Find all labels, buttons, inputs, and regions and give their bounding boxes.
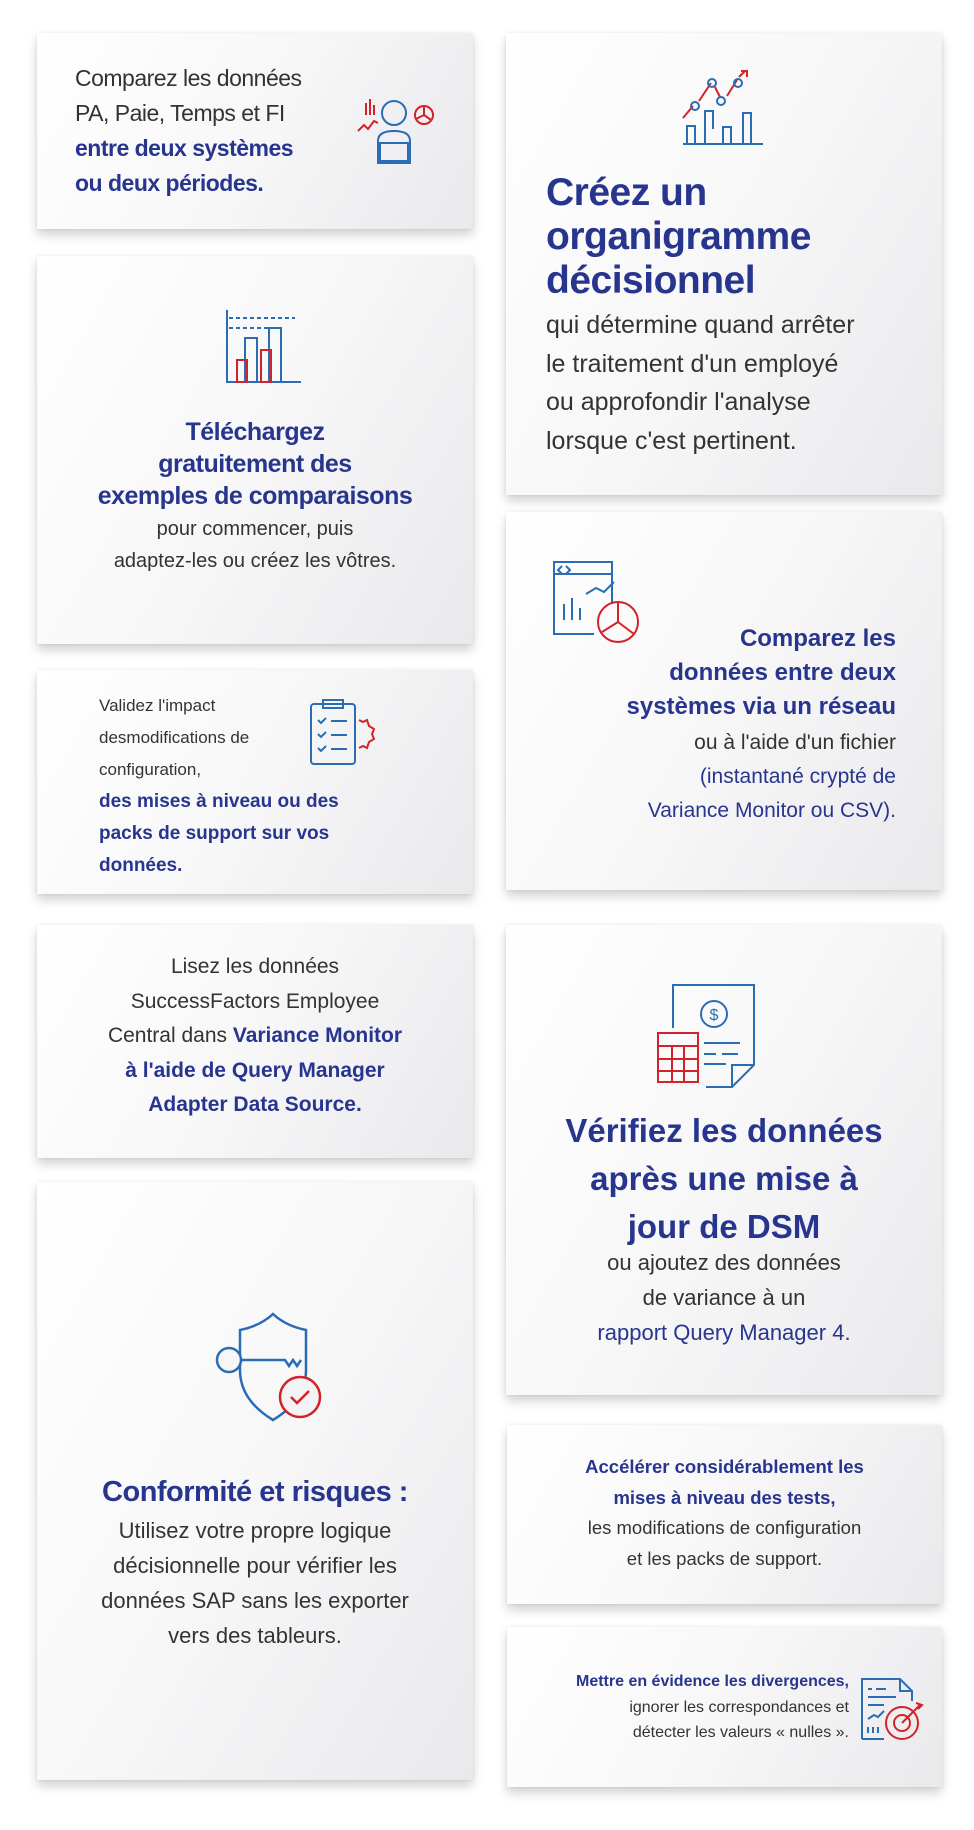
icon: growth chart [682, 70, 763, 145]
text: body [648, 731, 896, 822]
text: validate: données. [99, 855, 182, 876]
text: compare PA: ou deux périodes. [75, 170, 263, 196]
panel: accelerate tests [507, 1425, 942, 1604]
text: successfactors [108, 955, 402, 1116]
text: validate: desmodifications de [99, 728, 249, 747]
text: body: lorsque c'est pertinent. [546, 426, 797, 454]
text: compliance body: décisionnelle pour vérifier les [113, 1553, 397, 1578]
text: body [597, 1250, 851, 1345]
heading: create flowchart: décisionnel [546, 259, 755, 302]
text: validate: Validez l'impact [99, 696, 215, 715]
text: body: rapport Query Manager 4. [597, 1320, 851, 1345]
heading: create flowchart: organigramme [546, 215, 811, 258]
heading: compare systems [626, 625, 896, 720]
text: body: le traitement d'un employé [546, 350, 838, 378]
text: body: qui détermine quand arrêter [546, 311, 855, 339]
heading: create flowchart [546, 171, 811, 302]
text: body: (instantané crypté de [700, 765, 896, 788]
text: compare PA [75, 65, 302, 196]
text: validate: packs de support sur vos [99, 823, 329, 844]
text: successfactors: SuccessFactors Employee [131, 990, 379, 1012]
text: body [114, 518, 396, 572]
text: body: ou à l'aide d'un fichier [694, 731, 896, 754]
panel: validate impact [37, 670, 473, 894]
text: successfactors: à l'aide de Query Manager [125, 1058, 385, 1082]
text: body: ou approfondir l'analyse [546, 388, 811, 416]
icon: report target [861, 1678, 924, 1740]
panel: compare PA data [37, 33, 473, 229]
heading: verify: jour de DSM [628, 1208, 820, 1245]
panel: compare via network [506, 512, 942, 890]
heading: compare systems: Comparez les [740, 625, 896, 652]
icon: bar chart [226, 310, 301, 383]
icon: document calculator [657, 984, 755, 1088]
text: body [546, 311, 855, 454]
text: validate [99, 696, 339, 876]
panel: decision flowchart [506, 33, 942, 495]
text: compliance body: vers des tableurs. [168, 1623, 342, 1648]
text: compliance body: Utilisez votre propre logique [119, 1518, 391, 1543]
text: compare PA: entre deux systèmes [75, 135, 293, 161]
heading: download [98, 418, 412, 510]
heading: download: exemples de comparaisons [98, 482, 412, 510]
heading: verify [565, 1112, 883, 1245]
heading: verify: après une mise à [590, 1160, 858, 1197]
text: successfactors: Central dans Variance Monitor [108, 1024, 402, 1047]
text: accelerate: les modifications de configuration [588, 1517, 861, 1538]
icon: document calculator: $ [710, 1007, 719, 1024]
text: accelerate: Accélérer considérablement les [585, 1456, 864, 1477]
text: divergences: détecter les valeurs « nulles ». [633, 1724, 849, 1741]
heading: download: Téléchargez [185, 418, 324, 446]
text: compliance body: données SAP sans les exporter [101, 1588, 409, 1613]
panel: verify DSM [506, 925, 942, 1395]
panel: SuccessFactors [37, 925, 473, 1158]
text: accelerate [585, 1456, 864, 1569]
heading: download: gratuitement des [158, 450, 352, 478]
text: body: de variance à un [643, 1285, 805, 1310]
text: divergences: Mettre en évidence les divergences, [576, 1673, 849, 1690]
heading: compare systems: systèmes via un réseau [626, 693, 896, 720]
text: body: Variance Monitor ou CSV). [648, 799, 896, 822]
text: validate: des mises à niveau ou des [99, 791, 339, 812]
text: divergences [576, 1673, 849, 1741]
text: accelerate: et les packs de support. [627, 1548, 822, 1568]
panel: download examples [37, 256, 473, 644]
text: body: ou ajoutez des données [607, 1250, 841, 1275]
text: successfactors: Adapter Data Source. [148, 1093, 362, 1116]
heading: compare systems: données entre deux [669, 659, 896, 686]
icon: dashboard window [553, 561, 639, 643]
panel: highlight divergences [507, 1627, 942, 1787]
panel: compliance [37, 1182, 473, 1780]
text: accelerate: mises à niveau des tests, [613, 1486, 836, 1508]
text: divergences: ignorer les correspondances et [629, 1698, 849, 1716]
text: successfactors: Lisez les données [171, 955, 339, 978]
text: body: pour commencer, puis [157, 518, 353, 540]
icon: shield key [216, 1312, 322, 1422]
heading: verify: Vérifiez les données [565, 1112, 883, 1149]
heading: create flowchart: Créez un [546, 171, 707, 214]
text: compliance body [101, 1518, 409, 1648]
heading: compliance: Conformité et risques : [102, 1476, 408, 1508]
text: validate: configuration, [99, 760, 201, 779]
text: compare PA: PA, Paie, Temps et FI [75, 100, 285, 126]
text: compare PA: Comparez les données [75, 65, 302, 91]
icon: clipboard gear [310, 699, 376, 765]
icon: person with charts [357, 99, 434, 164]
text: body: adaptez-les ou créez les vôtres. [114, 550, 396, 572]
